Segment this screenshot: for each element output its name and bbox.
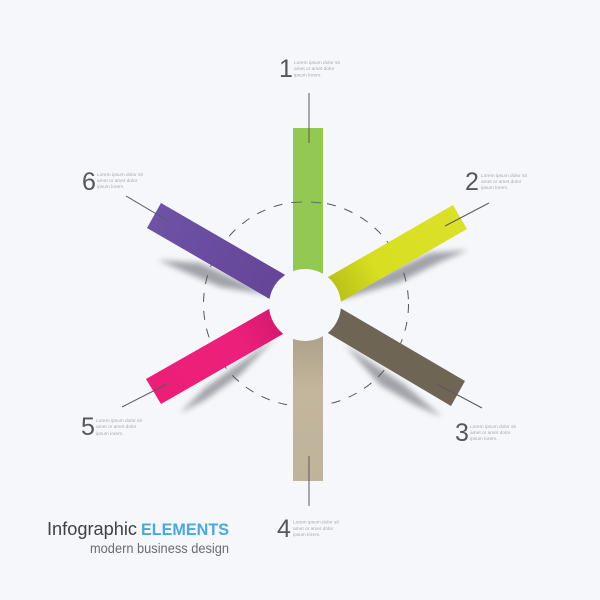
label 3 <box>455 419 517 447</box>
pointer line 1 <box>308 93 310 143</box>
pointer line 5 <box>122 384 167 407</box>
label 3: 3 <box>455 419 469 447</box>
pointer line 4 <box>308 456 310 506</box>
label 5: 5 <box>81 413 95 441</box>
shadows under bars <box>158 250 468 417</box>
label 5: amet or amet dolor <box>96 424 137 430</box>
dashed ring <box>204 202 408 406</box>
label 1: 1 <box>279 55 293 83</box>
label 3: ipsum lorem. <box>470 436 497 442</box>
bar 6: purple <box>147 203 294 305</box>
label 3: amet or amet dolor <box>470 430 511 436</box>
title <box>47 519 229 556</box>
title: Infographic <box>47 519 137 539</box>
title: modern business design <box>90 540 229 556</box>
label 6: ipsum lorem. <box>97 184 124 190</box>
label 1: amet or amet dolor <box>294 66 335 72</box>
label 2 <box>465 168 528 196</box>
label 1: Lorem ipsum dolor sit <box>294 60 341 66</box>
label 6: Lorem ipsum dolor sit <box>97 172 144 178</box>
label 1 <box>279 55 341 83</box>
label 4: amet or amet dolor <box>293 526 334 532</box>
centre circle <box>269 269 341 341</box>
label 1: ipsum lorem. <box>294 72 321 78</box>
label 2: ipsum lorem. <box>481 185 508 191</box>
label 3: Lorem ipsum dolor sit <box>470 424 517 430</box>
label 5: ipsum lorem. <box>96 431 123 437</box>
pointer line 2 <box>445 203 489 226</box>
label 4: ipsum lorem. <box>293 532 320 538</box>
bar 3: brown <box>316 302 465 406</box>
label 6: amet or amet dolor <box>97 178 138 184</box>
bar 1: green <box>293 128 323 278</box>
label 2: amet or amet dolor <box>481 179 522 185</box>
bar 2: lemon <box>316 205 467 308</box>
dash marks over green bar <box>292 202 321 203</box>
label 2: 2 <box>465 168 479 196</box>
label 4: Lorem ipsum dolor sit <box>293 520 340 526</box>
pointer line 3 <box>437 384 482 408</box>
label 6 <box>82 168 144 196</box>
label 4 <box>277 515 340 543</box>
pointer line 6 <box>126 196 170 222</box>
label 6: 6 <box>82 168 96 196</box>
bar 4: tan <box>293 330 323 481</box>
title: ELEMENTS <box>141 520 229 539</box>
label 5: Lorem ipsum dolor sit <box>96 418 143 424</box>
bar 5: magenta <box>146 305 290 404</box>
label 2: Lorem ipsum dolor sit <box>481 173 528 179</box>
label 5 <box>81 413 143 441</box>
label 4: 4 <box>277 515 291 543</box>
